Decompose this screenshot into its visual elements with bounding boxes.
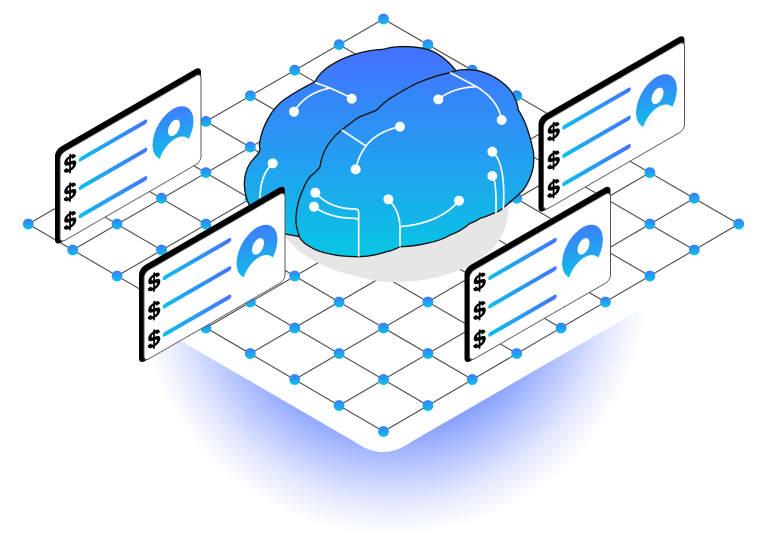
grid nodes bbox=[23, 14, 744, 437]
isometric grid lines bbox=[28, 19, 739, 432]
text lines bbox=[81, 122, 145, 216]
dollar signs: $ bbox=[473, 267, 486, 299]
dollar signs: $ bbox=[473, 324, 486, 356]
dollar signs bbox=[547, 116, 560, 206]
avatar bbox=[152, 106, 194, 160]
dollar signs: $ bbox=[64, 205, 77, 238]
text lines bbox=[165, 241, 229, 334]
avatar bbox=[236, 224, 278, 278]
back lobe circuits bbox=[260, 83, 357, 198]
card body bbox=[139, 184, 285, 364]
blue glow under platform bbox=[134, 25, 650, 535]
card: top left bbox=[55, 66, 201, 248]
dollar signs: $ bbox=[473, 295, 486, 328]
dollar signs: $ bbox=[148, 267, 161, 299]
front brain lobe bbox=[296, 70, 534, 257]
brain ground shadow bbox=[280, 163, 509, 282]
card body bbox=[55, 66, 201, 246]
avatar bbox=[562, 224, 603, 278]
dollar signs: $ bbox=[547, 116, 560, 149]
text lines bbox=[564, 90, 628, 184]
card body bbox=[538, 34, 684, 214]
dollar signs: $ bbox=[64, 177, 77, 209]
dollar signs: $ bbox=[64, 148, 77, 181]
dollar signs: $ bbox=[148, 295, 161, 328]
dollar signs: $ bbox=[547, 145, 560, 177]
card body bbox=[464, 184, 610, 364]
dollar signs bbox=[473, 267, 486, 356]
dollar signs: $ bbox=[148, 324, 161, 356]
avatar bbox=[636, 74, 677, 128]
text lines bbox=[490, 241, 554, 334]
front lobe circuits bbox=[309, 73, 507, 257]
card: top right bbox=[538, 34, 684, 216]
brain bbox=[244, 47, 534, 282]
card: bottom right bbox=[464, 184, 610, 366]
back brain lobe bbox=[244, 47, 457, 237]
dollar signs bbox=[148, 267, 161, 356]
dollar signs bbox=[64, 148, 77, 238]
dollar signs: $ bbox=[547, 173, 560, 206]
card: bottom left bbox=[139, 184, 285, 366]
